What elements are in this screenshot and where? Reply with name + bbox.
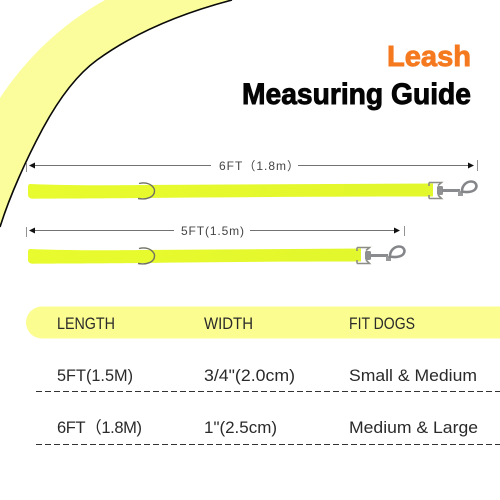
leash: 5FT bbox=[28, 246, 404, 264]
snap hook bbox=[357, 246, 404, 264]
heading: Leash: Leash bbox=[387, 41, 471, 73]
title bbox=[242, 41, 471, 111]
decorative yellow arc with black edge bbox=[0, 0, 232, 227]
table bbox=[26, 306, 500, 444]
row: 5FT: Small & Medium bbox=[349, 367, 477, 385]
D-ring bbox=[138, 183, 155, 199]
header labels: WIDTH bbox=[204, 315, 253, 333]
header labels bbox=[57, 315, 415, 333]
label: 5FT length: 5FT(1.5m) bbox=[181, 224, 244, 238]
header labels: FIT DOGS bbox=[349, 315, 415, 333]
label: 6FT length: 6FT（1.8m） bbox=[219, 159, 299, 173]
dimension: 5FT bbox=[26, 224, 404, 238]
leash: 6FT bbox=[28, 182, 476, 199]
row: 6FT bbox=[57, 418, 478, 437]
table header bar bbox=[26, 306, 500, 338]
dimension: 6FT bbox=[26, 159, 478, 173]
snap hook bbox=[429, 182, 476, 198]
row: 5FT: 5FT(1.5M) bbox=[57, 367, 133, 385]
heading: Measuring Guide: Measuring Guide bbox=[242, 78, 471, 111]
D-ring bbox=[138, 248, 155, 264]
row: 5FT: 3/4"(2.0cm) bbox=[204, 367, 295, 385]
row: 5FT bbox=[57, 367, 477, 385]
header labels: LENGTH bbox=[57, 315, 115, 333]
row: 6FT: 6FT（1.8M) bbox=[57, 418, 142, 437]
row: 6FT: Medium & Large bbox=[349, 419, 478, 437]
row: 6FT: 1"(2.5cm) bbox=[204, 419, 277, 437]
